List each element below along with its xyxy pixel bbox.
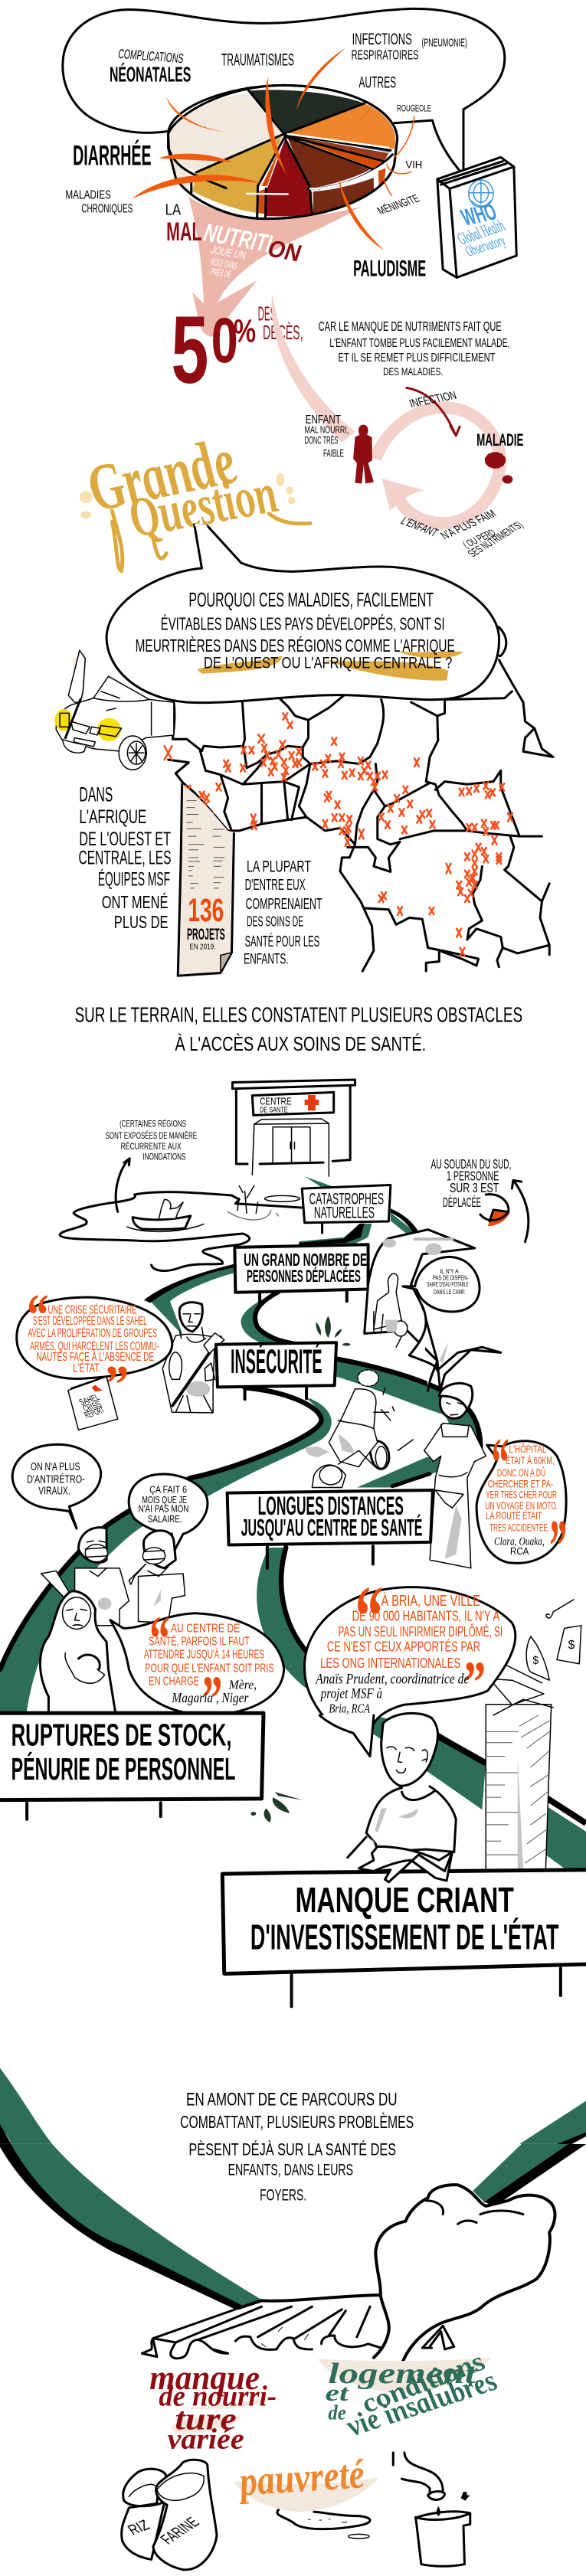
heading: la malnutrition: LA <box>165 201 181 218</box>
speech bubbles: nurses: D'ANTIRÉTRO- <box>27 1473 85 1486</box>
sign: insecurite <box>216 1342 336 1399</box>
Grande Question title: Question <box>120 462 286 548</box>
text left of scroll: DANS <box>79 783 113 806</box>
text: CATASTROPHES <box>309 1190 384 1208</box>
pie outlines <box>169 85 398 219</box>
quote: Bria: Bria, RCA <box>329 1702 370 1716</box>
quote: Bria: ” <box>463 1649 486 1715</box>
winding road <box>0 1176 480 1735</box>
text right of scroll <box>244 858 322 967</box>
woman with headscarf <box>424 1383 486 1568</box>
sign: longues distances <box>228 1490 433 1568</box>
speech bubble: water in camp: IL N'Y A <box>440 1267 459 1274</box>
WHO book: WHO <box>457 198 500 230</box>
health center building: CENTRE <box>260 1097 292 1107</box>
text right of scroll: DES SOINS DE <box>247 914 303 929</box>
flag <box>73 653 87 702</box>
slice: VIH <box>291 136 388 160</box>
road: big lower arc <box>0 2068 586 2144</box>
label: logement et conditions de vie insalubres <box>318 2347 503 2442</box>
quote: insecurite: L'ÉTAT. <box>73 1361 101 1375</box>
text: PERSONNES DÉPLACÉES <box>247 1267 361 1286</box>
flood scene: SONT EXPOSÉES DE MANIÈRE <box>106 1130 197 1141</box>
leaves near ruptures sign <box>250 1792 303 1822</box>
quote: centre de sante: ATTENDRE JUSQU'À 14 HEURES <box>144 1647 264 1661</box>
text: PROJETS <box>187 926 225 943</box>
label: logement et conditions de vie insalubres: vie insalubres <box>339 2365 503 2442</box>
speech bubbles: nurses: MOIS QUE JE <box>142 1495 187 1505</box>
house with smoke cloud and roof <box>142 2185 555 2365</box>
money flying: $ <box>532 1654 539 1666</box>
arrow <box>116 1159 129 1211</box>
labels of pie chart: RESPIRATOIRES <box>352 47 418 63</box>
50% des deces: DES <box>258 302 276 325</box>
Grande Question title <box>77 425 310 571</box>
sign: ruptures de stock <box>0 1713 264 1819</box>
quote: centre de sante: POUR QUE L'ENFANT SOIT PRIS <box>145 1661 274 1675</box>
text left of scroll <box>78 783 171 932</box>
project markers on map <box>165 713 512 956</box>
road: left of displaced sign <box>149 1267 235 1335</box>
cycle malnutrition infection: FAIBLE <box>323 448 344 459</box>
quote: centre de sante: Mère, <box>228 1678 257 1692</box>
money flying <box>489 1600 581 1715</box>
text: AVEC LA PROLIFÉRATION DE GROUPES <box>28 1326 157 1339</box>
text right of scroll: ENFANTS. <box>244 950 289 967</box>
labels of pie chart: MÉNINGITE <box>375 192 422 217</box>
label: logement et conditions de vie insalubres: logement <box>328 2358 477 2390</box>
pink arrow from 50% <box>271 294 355 443</box>
cycle malnutrition infection: MAL NOURRI, <box>305 424 349 436</box>
road: toward right edge <box>370 1715 586 1885</box>
label: manque de nourriture variee: variée <box>168 2423 244 2455</box>
slice: meningite <box>291 137 386 186</box>
quote: insecurite: ” <box>105 1355 129 1415</box>
motorcycle rider <box>305 1370 413 1487</box>
cloud <box>375 2185 555 2365</box>
quote: centre de sante: ” <box>201 1663 222 1735</box>
speech bubbles: nurses <box>12 1444 208 1551</box>
text: COMPRENAIENT <box>246 896 322 913</box>
text: S'EST DÉVELOPPÉE DANS LE SAHEL <box>33 1314 147 1327</box>
heading: la malnutrition: ON <box>264 235 305 266</box>
icon: food sacks: FARINE <box>156 2514 203 2547</box>
money flying: $ <box>568 1639 575 1652</box>
text: CENTRALE, LES <box>78 848 171 868</box>
quote: hopital: L'HÔPITAL <box>509 1443 546 1455</box>
slice: traumatismes <box>250 90 365 134</box>
heading: la malnutrition: NUTRITI <box>200 219 276 258</box>
cycle malnutrition infection: SES NUTRIMENTS) <box>466 520 526 559</box>
Sahel crisis report <box>68 1377 118 1430</box>
quote: hopital: RCA <box>510 1546 529 1557</box>
label: manque de nourriture variee <box>149 2359 278 2455</box>
quote: hopital: “ <box>492 1424 509 1502</box>
text left of scroll: ONT MENÉ <box>102 891 169 912</box>
flood scene: INONDATIONS <box>142 1152 186 1162</box>
cycle malnutrition infection: N'A PLUS FAIM <box>438 508 499 541</box>
quote: Bria: “ <box>355 1568 383 1665</box>
labels of pie chart: VIH <box>405 159 422 171</box>
quote: hopital <box>476 1424 567 1589</box>
heading: la malnutrition: JOUE UN <box>209 244 247 262</box>
labels of pie chart: AUTRES <box>358 74 396 91</box>
explanation text <box>319 319 509 378</box>
labels of pie chart: COMPLICATIONS <box>117 47 185 66</box>
plant <box>409 1306 501 1391</box>
labels of pie chart: MALADIES <box>65 188 111 201</box>
text: en amont, end: ENFANTS, DANS LEURS <box>228 2161 353 2179</box>
text: (PNEUMONIE) <box>421 36 467 49</box>
50% des deces <box>171 296 303 404</box>
text: en amont, end: FOYERS. <box>260 2187 306 2205</box>
quote: centre de sante: AU CENTRE DE <box>171 1622 240 1635</box>
virus <box>487 454 503 466</box>
flood scene <box>60 1119 303 1271</box>
sign: ruptures de stock: RUPTURES DE STOCK, <box>11 1718 231 1752</box>
text: ÉQUIPES MSF <box>98 869 170 891</box>
WHO logo <box>469 180 493 208</box>
slice: rougeole <box>290 134 391 152</box>
text: en amont, end: PÈSENT DÉJÀ SUR LA SANTÉ DES <box>188 2140 396 2159</box>
quote: centre de sante: EN CHARGE <box>149 1674 199 1688</box>
scroll: 136 projets: EN 2019. <box>189 942 216 951</box>
heading: la malnutrition: PRÈS DE <box>209 266 232 280</box>
leaves near insecurity <box>316 1316 351 1345</box>
flood scene: RÉCURRENTE AUX <box>121 1141 182 1152</box>
arrow: infection <box>407 387 460 436</box>
quote: hopital: Clara, Ouaka, <box>494 1535 545 1548</box>
text left of scroll: L'AFRIQUE <box>79 806 146 828</box>
quote: centre de sante: “ <box>149 1603 170 1675</box>
funnel from pie to 50% <box>188 197 361 336</box>
Grande Question title: Grande <box>77 425 247 525</box>
text: Global Health <box>453 216 509 248</box>
dead tree <box>237 1186 258 1213</box>
text: ARMÉS, QUI HARCÈLENT LES COMMU- <box>30 1339 159 1352</box>
clinic sign <box>252 1092 334 1115</box>
slice: malnutrition crimson <box>266 139 312 216</box>
health center building: DE SANTÉ <box>260 1104 288 1114</box>
label: manque de nourriture variee: de nourri- <box>159 2380 277 2412</box>
sign: catastrophes naturelles: NATURELLES <box>314 1204 375 1221</box>
arrow <box>512 1180 529 1242</box>
South Sudan note: DÉPLACÉE <box>443 1195 481 1210</box>
speech bubbles: nurses: ON N'A PLUS <box>31 1460 80 1473</box>
text right of scroll: D'ENTRE EUX <box>245 877 306 894</box>
labels of pie chart: CHRONIQUES <box>81 201 133 215</box>
flood scene: (CERTAINES RÉGIONS <box>119 1119 186 1129</box>
nurses figures <box>41 1528 185 1626</box>
speech bubbles: nurses: N'AI PAS MON <box>139 1504 188 1515</box>
text: DÉCÈS, <box>263 321 303 344</box>
label: pauvrete <box>234 2450 379 2512</box>
road: behind catastrophes sign <box>299 1213 415 1245</box>
label: logement et conditions de vie insalubres: conditions <box>354 2347 492 2417</box>
Sahel crisis report: SAHEL <box>77 1392 101 1407</box>
scroll: 136 projets: 136 <box>188 891 224 928</box>
road: top tip <box>305 1176 335 1187</box>
red cross <box>305 1095 319 1110</box>
heading: la malnutrition: RÔLE DANS <box>209 257 239 272</box>
labels of pie chart: TRAUMATISMES <box>221 51 294 70</box>
orange pointer strokes <box>132 47 414 250</box>
speech bubbles: nurses: ÇA FAIT 6 <box>149 1485 187 1496</box>
quote: Bria: projet MSF à <box>319 1685 382 1702</box>
child hands on sign <box>374 1852 452 1882</box>
door <box>252 1119 329 1176</box>
pie chart: causes of child mortality <box>169 85 398 219</box>
50% des deces: 0 <box>211 305 238 377</box>
text: UN GRAND NOMBRE DE <box>244 1249 367 1270</box>
quote: centre de sante: SANTÉ, PARFOIS IL FAUT <box>149 1634 250 1648</box>
pink ring arrow <box>375 407 500 523</box>
quote: insecurite: UNE CRISE SÉCURITAIRE <box>47 1303 137 1316</box>
slice: neonatal <box>169 93 284 191</box>
cycle labels: INFECTION <box>408 388 458 410</box>
slice: paludisme <box>288 138 374 214</box>
WHO book <box>437 157 516 277</box>
50% des deces: 5 <box>171 296 208 404</box>
speech bubble: water in camp: PAS DE DISPEN- <box>433 1274 468 1281</box>
highlight marks <box>197 650 463 681</box>
South Sudan note: SUR 3 EST <box>450 1181 499 1195</box>
pie body <box>169 85 398 219</box>
text: en amont <box>180 2090 414 2132</box>
icon: food sacks <box>122 2460 217 2570</box>
Sahel crisis report: CRISIS <box>81 1399 103 1414</box>
cycle malnutrition infection: DONC TRÈS <box>305 434 339 446</box>
labels of pie chart: ROUGEOLE <box>397 104 431 114</box>
Sahel crisis report: REPORT <box>83 1405 106 1420</box>
slice: autres <box>288 103 395 149</box>
slice: strip <box>257 148 280 214</box>
roof <box>239 2295 389 2358</box>
cycle malnutrition infection: ( OU PERD <box>460 528 499 551</box>
heading: la malnutrition: MAL <box>166 217 201 247</box>
speech bubble: grande question <box>106 525 506 703</box>
headlights <box>55 709 72 731</box>
quote: Bria: Anaïs Prudent, coordinatrice de <box>315 1671 469 1687</box>
labels of pie chart: PALUDISME <box>353 257 426 281</box>
quote: Bria: À BRIA, UNE VILLE <box>381 1593 480 1610</box>
icon: puddle <box>277 2510 370 2538</box>
quote: Bria <box>305 1568 516 1730</box>
labels of pie chart: DIARRHÉE <box>73 139 152 172</box>
South Sudan note <box>431 1156 529 1242</box>
speech bubbles: nurses: VIRAUX. <box>38 1484 70 1497</box>
50% des deces: % <box>234 312 256 349</box>
sign: manque criant <box>222 1870 586 2006</box>
speech bubble: water in camp: SAIRE D'EAU POTABLE <box>427 1280 469 1288</box>
slice: diarrhee <box>192 137 282 213</box>
labels of pie chart: NÉONATALES <box>110 62 191 87</box>
quote: insecurite <box>17 1282 172 1415</box>
text: PÉNURIE DE PERSONNEL <box>11 1751 235 1787</box>
child silhouette <box>353 425 374 483</box>
map of west and central Africa <box>169 660 553 971</box>
text: DE L'OUEST ET <box>79 829 171 850</box>
South Sudan note: 1 PERSONNE <box>447 1169 499 1184</box>
sign: personnes deplacees <box>234 1244 368 1304</box>
label: manque de nourriture variee: ture <box>175 2401 237 2437</box>
icon: tap, drop and cup <box>393 2453 470 2566</box>
WHO book: Observatory <box>462 233 509 260</box>
child figure <box>319 1713 456 1882</box>
text: en amont, end <box>188 2140 396 2205</box>
scroll list lines <box>187 801 224 888</box>
icon: food sacks: RIZ <box>125 2517 153 2538</box>
label: manque de nourriture variee: manque <box>149 2359 260 2397</box>
cycle malnutrition infection: L'ENFANT <box>398 515 441 539</box>
quote: centre de sante: Magaria , Niger <box>172 1690 249 1705</box>
label: logement et conditions de vie insalubres: de <box>328 2401 346 2424</box>
text left of scroll: PLUS DE <box>114 911 169 932</box>
label: logement et conditions de vie insalubres: et <box>325 2380 350 2406</box>
health center building <box>232 1080 355 1176</box>
road: from insecurity to lower left <box>0 1398 332 1716</box>
text right of scroll: LA PLUPART <box>247 858 311 876</box>
scroll: 136 projets <box>178 784 234 976</box>
text: MALADIE <box>476 430 524 449</box>
labels of pie chart: INFECTIONS <box>352 30 412 48</box>
road: hairpin right <box>336 1359 480 1487</box>
mother and baby <box>40 1591 116 1715</box>
speech bubble: water in camp <box>403 1257 480 1312</box>
label: pauvrete: pauvreté <box>234 2450 368 2505</box>
quote: insecurite: NAUTÉS FACE À L'ABSENCE DE <box>36 1350 154 1363</box>
cycle malnutrition infection: ENFANT <box>306 413 341 426</box>
labels of pie chart <box>65 30 467 281</box>
quote: insecurite: “ <box>27 1282 48 1348</box>
cycle malnutrition infection <box>271 294 526 559</box>
fly <box>461 2492 470 2501</box>
text: en amont: EN AMONT DE CE PARCOURS DU <box>186 2090 398 2110</box>
speech bubble: water in camp: DANS LE CAMP. <box>434 1288 465 1296</box>
heading: la malnutrition <box>165 201 305 280</box>
displaced people camp <box>365 1230 501 1391</box>
text: INSÉCURITÉ <box>231 1342 322 1381</box>
sign: catastrophes naturelles <box>302 1185 391 1233</box>
icon: MSF car <box>55 650 174 770</box>
small pie <box>488 1210 510 1226</box>
stack of papers <box>486 1705 552 1872</box>
canoe <box>133 1216 191 1229</box>
text: SANTÉ POUR LES <box>245 933 319 950</box>
quote: centre de sante <box>110 1603 284 1735</box>
road: under displaced sign <box>241 1290 299 1345</box>
quote: Bria: LES ONG INTERNATIONALES <box>320 1655 460 1671</box>
big thought bubble around pie <box>63 8 505 175</box>
heading: obstacles <box>75 1003 522 1055</box>
soldier figure <box>162 1303 224 1413</box>
explanation text: DES MALADIES. <box>383 366 443 378</box>
speech bubbles: nurses: SALAIRE. <box>148 1514 182 1525</box>
road: below long distance sign <box>257 1548 374 1735</box>
